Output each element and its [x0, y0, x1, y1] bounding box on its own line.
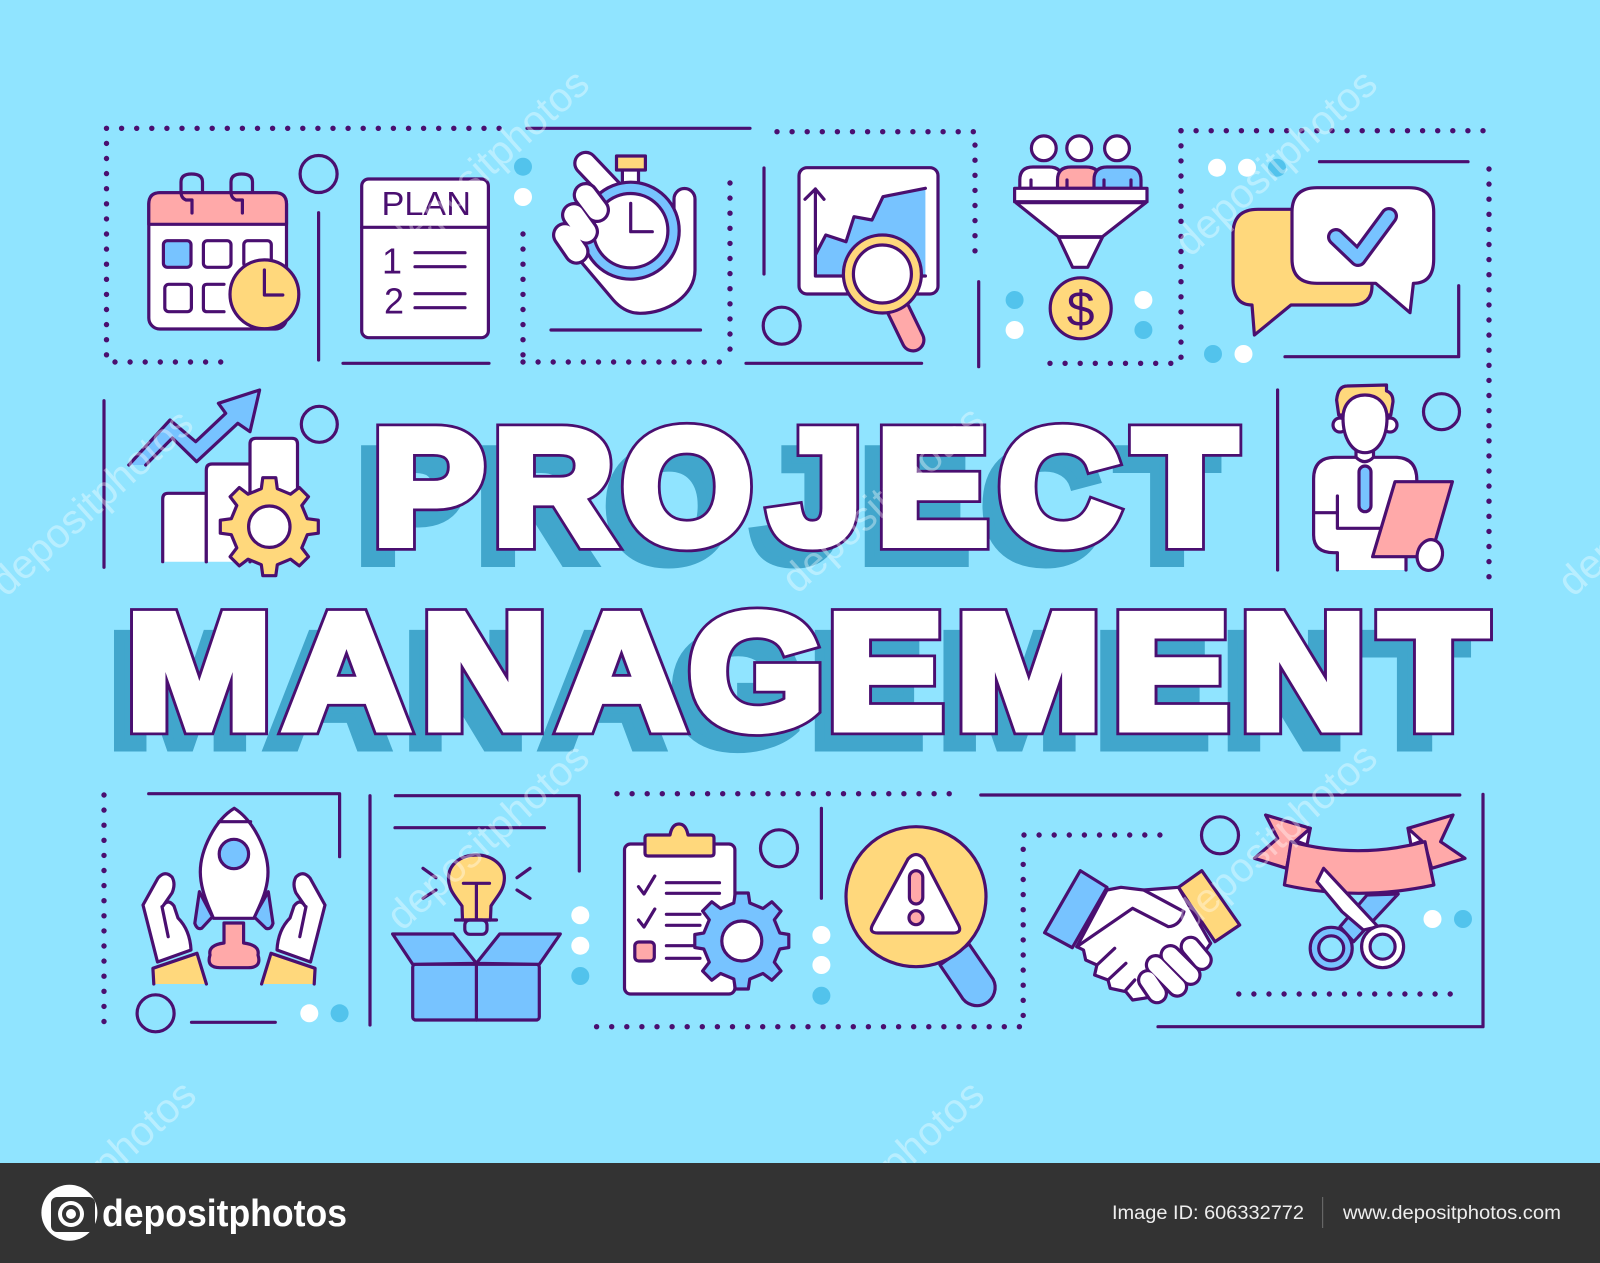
icon: calendar with clock: [149, 174, 299, 329]
title: PROJECT: [355, 415, 1218, 598]
icon: chat bubbles with check: [1233, 188, 1434, 335]
footer logo: [41, 1185, 347, 1241]
title: MANAGEMENT: [126, 580, 1487, 763]
icon: plan sheet: [362, 179, 488, 338]
title: MANAGEMENT: [126, 580, 1487, 763]
watermark: depositphotos: [377, 60, 598, 265]
icon: plan sheet: PLAN: [382, 185, 471, 222]
watermark: depositphotos: [772, 397, 993, 602]
icon: stopwatch in hand: [565, 156, 695, 313]
title: PROJECT: [373, 396, 1236, 579]
footer bar: [0, 1163, 1600, 1263]
icon: clipboard checklist with gear: [624, 824, 789, 994]
icon: light bulb over open box: [393, 855, 560, 1020]
title: MANAGEMENT: [107, 599, 1468, 782]
footer logo: depositphotos: [102, 1193, 347, 1235]
icon: handshake: [1045, 871, 1240, 1000]
icon: rocket between hands: [143, 808, 325, 984]
watermark: depositphotos: [1165, 60, 1386, 265]
icon: sales funnel with people and coin: $: [1067, 281, 1095, 337]
icon: project manager with clipboard: [1314, 385, 1452, 573]
title: PROJECT: [373, 396, 1236, 579]
watermark: depositphotos: [1165, 734, 1386, 939]
icon: sales funnel with people and coin: [1015, 136, 1147, 339]
icon: ribbon cutting scissors: [1254, 815, 1465, 969]
footer image id: Image ID: 606332772: [1112, 1203, 1304, 1224]
icon: chart under magnifier: [799, 168, 938, 340]
icon: warning magnifier: [846, 827, 995, 1006]
icon: growth bars, arrow and gear: [129, 390, 318, 576]
icon: plan sheet: 2: [384, 280, 404, 322]
icon: plan sheet: 1: [382, 240, 402, 281]
watermark: depositphotos: [377, 734, 598, 939]
title: [107, 396, 1487, 782]
footer website: www.depositphotos.com: [1342, 1203, 1561, 1224]
